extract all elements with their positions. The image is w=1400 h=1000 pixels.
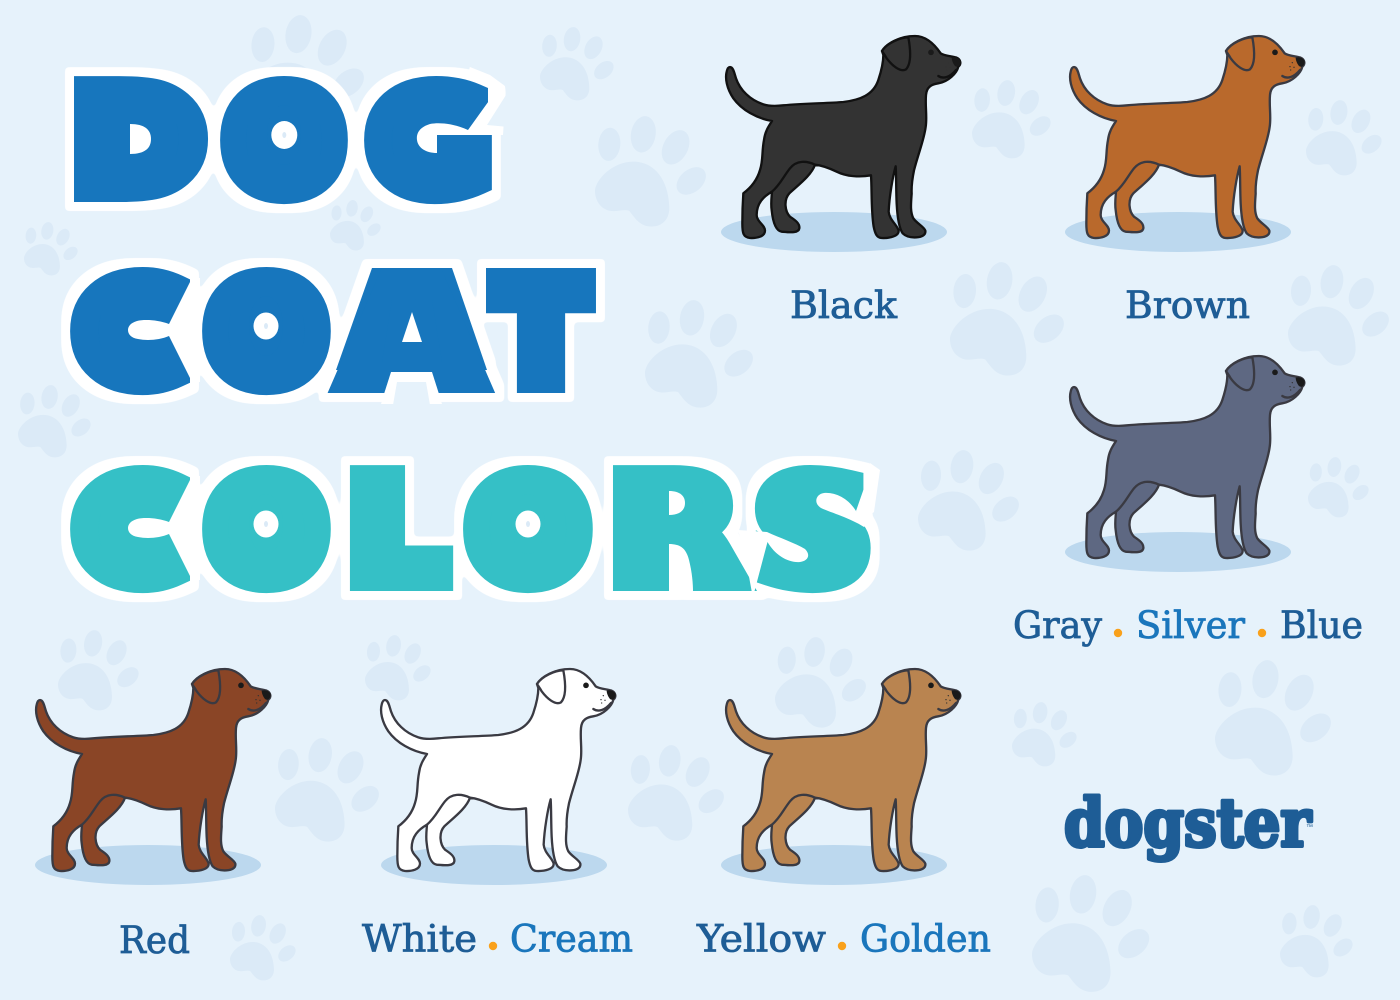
letters C O A T: C: [77, 255, 185, 413]
letters C O A T: O: [208, 256, 325, 413]
label: Gray Silver Blue: Gray: [1013, 604, 1102, 647]
letters C O A T: T: [498, 255, 585, 413]
red dog illustration: [36, 669, 271, 871]
letters C O L O R S: R: [614, 451, 736, 610]
dog panel: Red: [35, 669, 271, 962]
label: Gray Silver Blue: [1013, 604, 1363, 647]
black dog illustration: [726, 36, 961, 238]
dogster logo: dogster: [1064, 784, 1312, 862]
label: White Cream: [362, 918, 633, 960]
letter counters for COAT: [120, 278, 442, 405]
ground shadow: [721, 845, 947, 885]
brown dog illustration: [1070, 36, 1305, 238]
label: White Cream: White: [362, 918, 477, 960]
ground shadow: [1065, 212, 1291, 252]
letters C O L O R S: O: [208, 454, 325, 611]
letter counters for DOG: [120, 55, 520, 168]
white dog illustration: [381, 669, 616, 871]
letters C O A T: A: [353, 259, 470, 409]
dog panel: Brown: [1065, 36, 1305, 327]
ground shadow: [721, 212, 947, 252]
gray dog illustration: [1070, 356, 1305, 558]
dog panel: Yellow Golden: [696, 669, 991, 960]
letters D O G: O: [226, 64, 342, 221]
title word: COLORS: [77, 451, 880, 611]
dog panel: Gray Silver Blue: [1013, 356, 1363, 647]
letter counters for COLORS: [120, 463, 880, 593]
label: White Cream: Cream: [510, 918, 633, 960]
label: Yellow Golden: Yellow: [696, 918, 826, 960]
ground shadow: [1065, 532, 1291, 572]
dog panel: White Cream: [362, 669, 633, 960]
ground shadow: [381, 845, 607, 885]
label: Red: Red: [119, 919, 190, 962]
ground shadow: [35, 845, 261, 885]
yellow dog illustration: [726, 669, 961, 871]
letters C O L O R S: S: [758, 453, 867, 610]
dog panel: Black: [721, 36, 961, 327]
letters C O L O R S: L: [350, 452, 443, 611]
label: Yellow Golden: [696, 918, 991, 960]
label: Black: Black: [790, 284, 898, 327]
label: Brown: Brown: [1125, 284, 1250, 327]
letters C O L O R S: C: [77, 453, 185, 611]
label: Gray Silver Blue: Blue: [1280, 604, 1363, 647]
letters D O G: [74, 63, 489, 222]
title word: DOG: [74, 55, 520, 222]
letters C O L O R S: [77, 451, 867, 611]
label: Gray Silver Blue: Silver: [1136, 604, 1245, 647]
title word: COAT: [77, 255, 585, 413]
dogster logo: ™: [1306, 824, 1313, 831]
title: Dog Coat Colors: [74, 55, 880, 611]
letters C O L O R S: O: [469, 454, 587, 611]
label: Yellow Golden: Golden: [860, 918, 991, 960]
letters C O A T: [77, 255, 585, 413]
letters D O G: D: [74, 63, 202, 222]
letters D O G: G: [371, 63, 489, 221]
